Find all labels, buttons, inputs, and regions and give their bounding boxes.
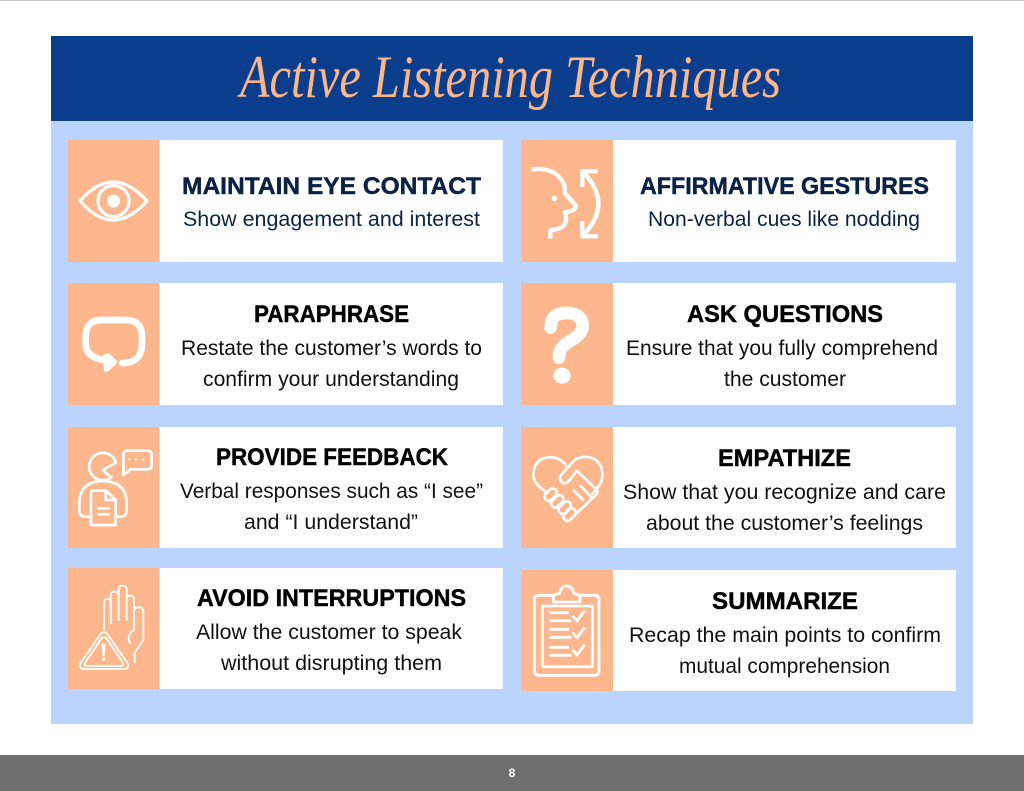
heading: SUMMARIZE [712, 588, 858, 615]
icon: loop arrow [86, 320, 142, 371]
heading: MAINTAIN EYE CONTACT [182, 173, 481, 200]
description [626, 337, 938, 391]
heading: PROVIDE FEEDBACK [216, 444, 449, 471]
icon: face and arrows [532, 169, 598, 239]
panel: maintain eye contact [68, 140, 503, 262]
heading: PARAPHRASE [254, 301, 409, 328]
description: Verbal responses such as “I see” [180, 480, 483, 503]
heading: ASK QUESTIONS [687, 301, 883, 328]
description: Allow the customer to speak [196, 621, 463, 644]
description: without disrupting them [220, 652, 442, 675]
icon: person with document and speech bubble [79, 451, 152, 525]
icon: raised hand and warning triangle [80, 586, 143, 669]
description: about the customer’s feelings [646, 512, 923, 535]
description: mutual comprehension [679, 655, 890, 678]
description: Show engagement and interest [183, 208, 480, 231]
panel: avoid interruptions [68, 568, 503, 689]
description [196, 621, 463, 675]
panel: paraphrase [68, 283, 503, 405]
description: Recap the main points to confirm [629, 624, 941, 647]
description: confirm your understanding [203, 368, 459, 391]
heading: EMPATHIZE [718, 445, 851, 472]
icon: heart handshake [533, 457, 602, 522]
description: and “I understand” [244, 511, 418, 534]
description: Ensure that you fully comprehend [626, 337, 938, 360]
description: Restate the customer’s words to [181, 337, 482, 360]
description [180, 480, 483, 534]
footer bar [0, 755, 1024, 791]
description [629, 624, 941, 678]
page number: 8 [509, 766, 516, 780]
panel: affirmative gestures [521, 140, 956, 262]
description: Show that you recognize and care [623, 481, 946, 504]
panel: summarize [521, 570, 956, 691]
panel: main background [51, 121, 973, 724]
panel: empathize [521, 427, 956, 548]
heading: AFFIRMATIVE GESTURES [640, 173, 929, 200]
title banner [51, 36, 973, 121]
title: Active Listening Techniques [237, 44, 781, 110]
description: the customer [724, 368, 846, 391]
panel: ask questions [521, 283, 956, 405]
icon: eye [80, 182, 147, 220]
icon: clipboard checklist [534, 586, 599, 675]
icon: question mark [551, 313, 583, 384]
description: Non-verbal cues like nodding [648, 208, 920, 231]
panel: provide feedback [68, 427, 503, 548]
description [623, 481, 946, 535]
heading: AVOID INTERRUPTIONS [197, 585, 466, 612]
description [181, 337, 482, 391]
